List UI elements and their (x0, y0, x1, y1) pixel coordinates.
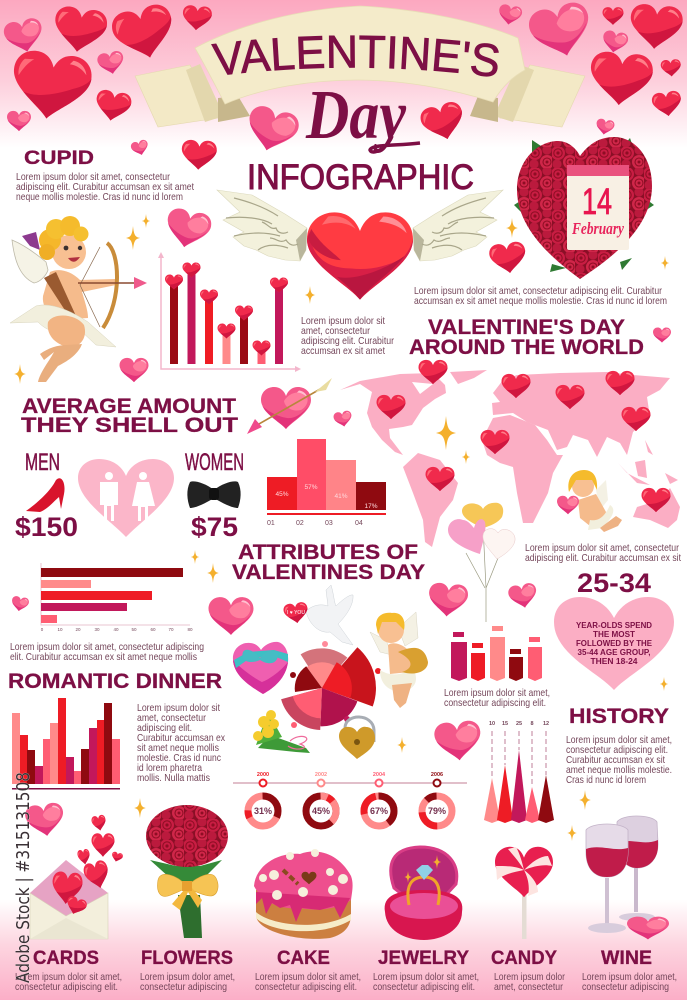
heart: age group callout: YEAR-OLDS SPEND (576, 621, 652, 630)
timeline with donuts: 2006 (431, 772, 443, 778)
chart: percentage columns: 57% (304, 484, 318, 491)
text: bottom descriptions: consectetur adipiscing (582, 981, 669, 993)
text: cupid description (16, 171, 194, 203)
rose heart with calendar (514, 137, 654, 279)
text: dinner description: mollis. Nulla mattis (137, 772, 210, 784)
chart: spikes (484, 721, 554, 823)
women: label, bow tie, amount: $75 (191, 512, 238, 542)
icon: heart with arrow (247, 378, 332, 434)
hearts: middle (10, 582, 539, 838)
text: bottom descriptions: consectetur adipiscing (140, 981, 227, 993)
chart: dinner bars (12, 698, 120, 790)
text: dinner description: Lorem ipsum dolor sit (137, 702, 220, 714)
heart: age group callout: THE MOST (593, 630, 635, 639)
chart: horizontal bars: 10 (57, 627, 63, 632)
labels: bottom categories: FLOWERS (141, 948, 233, 969)
heading: average amount (21, 394, 238, 437)
text: dinner description: id lorem pharetra (137, 762, 202, 774)
chart: spikes: 8 (530, 721, 534, 727)
chart: horizontal bars: 70 (168, 627, 174, 632)
text: chart description: amet, consectetur (301, 325, 370, 337)
timeline with donuts (233, 772, 467, 826)
labels: bottom categories: CARDS (33, 948, 99, 969)
icon: heart lollipop (495, 847, 553, 939)
text: bottom descriptions: Lorem ipsum dolor sit amet, (255, 971, 361, 983)
heading: attributes: ATTRIBUTES OF (238, 541, 418, 564)
text: dinner description: Curabitur accumsan ex (137, 732, 226, 744)
icon: rose bouquet (146, 805, 228, 938)
timeline with donuts: 2000 (257, 772, 269, 778)
text: bars description: elit. Curabitur accumsan ex sit amet neque mollis (10, 651, 197, 663)
text: chart description: adipiscing elit. Curabitur (301, 335, 394, 347)
heading: average amount: AVERAGE AMOUNT (22, 394, 236, 418)
text: cylinders description: consectetur adipiscing elit. (444, 697, 546, 709)
chart: horizontal bars: 40 (113, 627, 119, 632)
heading: average amount: THEY SHELL OUT (21, 413, 238, 437)
icon: dove with love note: I ♥ YOU (287, 610, 305, 616)
text: bottom descriptions: amet, consectetur (494, 981, 563, 993)
banner ribbon (135, 6, 585, 127)
chart: horizontal bars: 50 (131, 627, 137, 632)
heart: age group callout: 35-44 AGE GROUP, (578, 648, 650, 657)
chart: horizontal bars: 80 (187, 627, 193, 632)
title (211, 35, 499, 197)
title: Day (305, 77, 407, 154)
chart: percentage columns: 41% (334, 493, 348, 500)
heading: age group: 25-34 (577, 568, 651, 598)
icon: yellow tulips (253, 710, 310, 753)
calendar: 14 (582, 181, 612, 222)
labels: bottom categories (33, 948, 652, 969)
chart: cylinders (451, 626, 542, 681)
chart: percentage columns: 02 (296, 520, 304, 527)
timeline with donuts: 79% (428, 806, 446, 816)
men: label, shoe, amount: MEN (25, 449, 60, 476)
heading: attributes (232, 541, 425, 584)
text: dinner description: amet, consectetur (137, 712, 206, 724)
chart: horizontal bars (41, 563, 193, 632)
sparkles (14, 214, 669, 841)
text: dinner description (137, 702, 226, 784)
hearts on map (376, 360, 670, 512)
illustration: cupid with bow (10, 216, 147, 382)
icon: ring box (385, 847, 462, 940)
icon: love letter envelope (30, 814, 124, 939)
timeline with donuts: 67% (370, 806, 388, 816)
men: label, shoe, amount (15, 449, 78, 542)
chart: spikes: 12 (543, 721, 549, 727)
winged heart (217, 190, 503, 300)
text: bars description: Lorem ipsum dolor sit amet, consectetur adipiscing (10, 641, 204, 653)
title: VALENTINE'S (211, 35, 499, 77)
icon: wine glasses (586, 816, 669, 939)
heading: history: HISTORY (569, 705, 669, 728)
calendar (567, 165, 629, 250)
text: bars description (10, 641, 204, 663)
text: dinner description: adipiscing elit. (137, 722, 192, 734)
chart: percentage columns: 03 (325, 520, 333, 527)
hearts: top-right cluster (497, 0, 684, 136)
hearts around title (120, 100, 671, 428)
text: dinner description: sit amet neque mollis (137, 742, 219, 754)
text: chart description (301, 315, 394, 357)
chart: percentage columns: 17% (364, 503, 378, 510)
icon: heart padlock (339, 717, 375, 759)
text: bottom descriptions: Lorem ipsum dolor amet, (140, 971, 235, 983)
text: cupid description: Lorem ipsum dolor sit amet, consectetur (16, 171, 170, 183)
labels: bottom categories: WINE (601, 948, 652, 969)
heading: attributes: VALENTINES DAY (232, 561, 425, 584)
title: INFOGRAPHIC (247, 158, 474, 197)
text: calendar description (414, 285, 667, 307)
chart: horizontal bars: 30 (94, 627, 100, 632)
world map (340, 370, 680, 547)
chart: horizontal bars: 60 (150, 627, 156, 632)
text: cupid description: adipiscing elit. Curabitur accumsan ex sit amet (16, 181, 194, 193)
heart: age group callout: FOLLOWED BY THE (576, 639, 653, 648)
timeline with donuts: 2004 (373, 772, 386, 778)
text: bottom descriptions: Lorem ipsum dolor sit amet, (15, 971, 122, 983)
text: history description: Curabitur accumsan ex sit (566, 754, 665, 766)
text: map description (525, 542, 681, 564)
text: bottom descriptions: consectetur adipiscing elit. (15, 981, 118, 993)
watermark: Adobe Stock | #315131508 (14, 772, 34, 983)
text: dinner description: molestie. Cras id nunc (137, 752, 221, 764)
heading: cupid: CUPID (24, 148, 94, 169)
icon: gift heart box (233, 642, 288, 694)
text: bottom descriptions: consectetur adipiscing elit. (373, 981, 475, 993)
labels: bottom categories: CANDY (491, 948, 557, 969)
chart: spikes: 10 (489, 721, 495, 727)
heading: romantic dinner: ROMANTIC DINNER (8, 670, 222, 693)
labels: bottom categories: JEWELRY (378, 948, 469, 969)
hearts: top-left cluster (2, 1, 213, 131)
women: label, bow tie, amount (185, 449, 244, 542)
heading: around the world: AROUND THE WORLD (409, 336, 644, 359)
chart: percentage columns: 01 (267, 520, 275, 527)
heading: around the world (409, 316, 644, 359)
text: cupid description: neque mollis molestie. Cras id nunc id lorem (16, 191, 183, 203)
heading: around the world: VALENTINE'S DAY (428, 316, 625, 339)
text: bottom descriptions (15, 971, 677, 993)
timeline with donuts: 31% (254, 806, 272, 816)
text: cylinders description (444, 687, 550, 709)
heart: age group callout (554, 597, 674, 690)
text: history description: consectetur adipiscing elit. (566, 744, 668, 756)
text: history description: Cras id nunc id lorem (566, 774, 646, 786)
timeline with donuts: 45% (312, 806, 330, 816)
labels: bottom categories: CAKE (277, 948, 330, 969)
illustration: cherub with heart (557, 470, 622, 532)
chart: percentage columns: 04 (355, 520, 363, 527)
illustration: cherub with harp (370, 612, 428, 708)
text: bottom descriptions: Lorem ipsum dolor sit amet, (373, 971, 479, 983)
men: label, shoe, amount: $150 (15, 512, 78, 542)
text: bottom descriptions: Lorem ipsum dolor (494, 971, 565, 983)
chart: horizontal bars: 20 (75, 627, 81, 632)
chart: percentage columns: 45% (275, 491, 289, 498)
calendar: February (571, 219, 624, 238)
text: bottom descriptions: consectetur adipiscing elit. (255, 981, 357, 993)
icon: heart cake (254, 849, 353, 939)
text: chart description: Lorem ipsum dolor sit (301, 315, 385, 327)
chart: spikes: 25 (516, 721, 522, 727)
timeline with donuts: 2002 (315, 772, 327, 778)
chart: percentage columns (267, 439, 386, 527)
chart: polar pie (281, 641, 381, 730)
heart with male and female icons (78, 459, 174, 537)
chart: horizontal bars: 0 (41, 627, 44, 632)
illustration: heart balloons (448, 503, 515, 622)
icon: dove with love note (283, 585, 353, 645)
women: label, bow tie, amount: WOMEN (185, 449, 244, 476)
text: history description (566, 734, 672, 786)
chart: spikes: 15 (502, 721, 508, 727)
text: chart description: accumsan ex sit amet (301, 345, 385, 357)
text: cylinders description: Lorem ipsum dolor sit amet, (444, 687, 550, 699)
chart: heart lollipop bars (158, 252, 301, 372)
heart: age group callout: THEN 18-24 (590, 657, 638, 666)
